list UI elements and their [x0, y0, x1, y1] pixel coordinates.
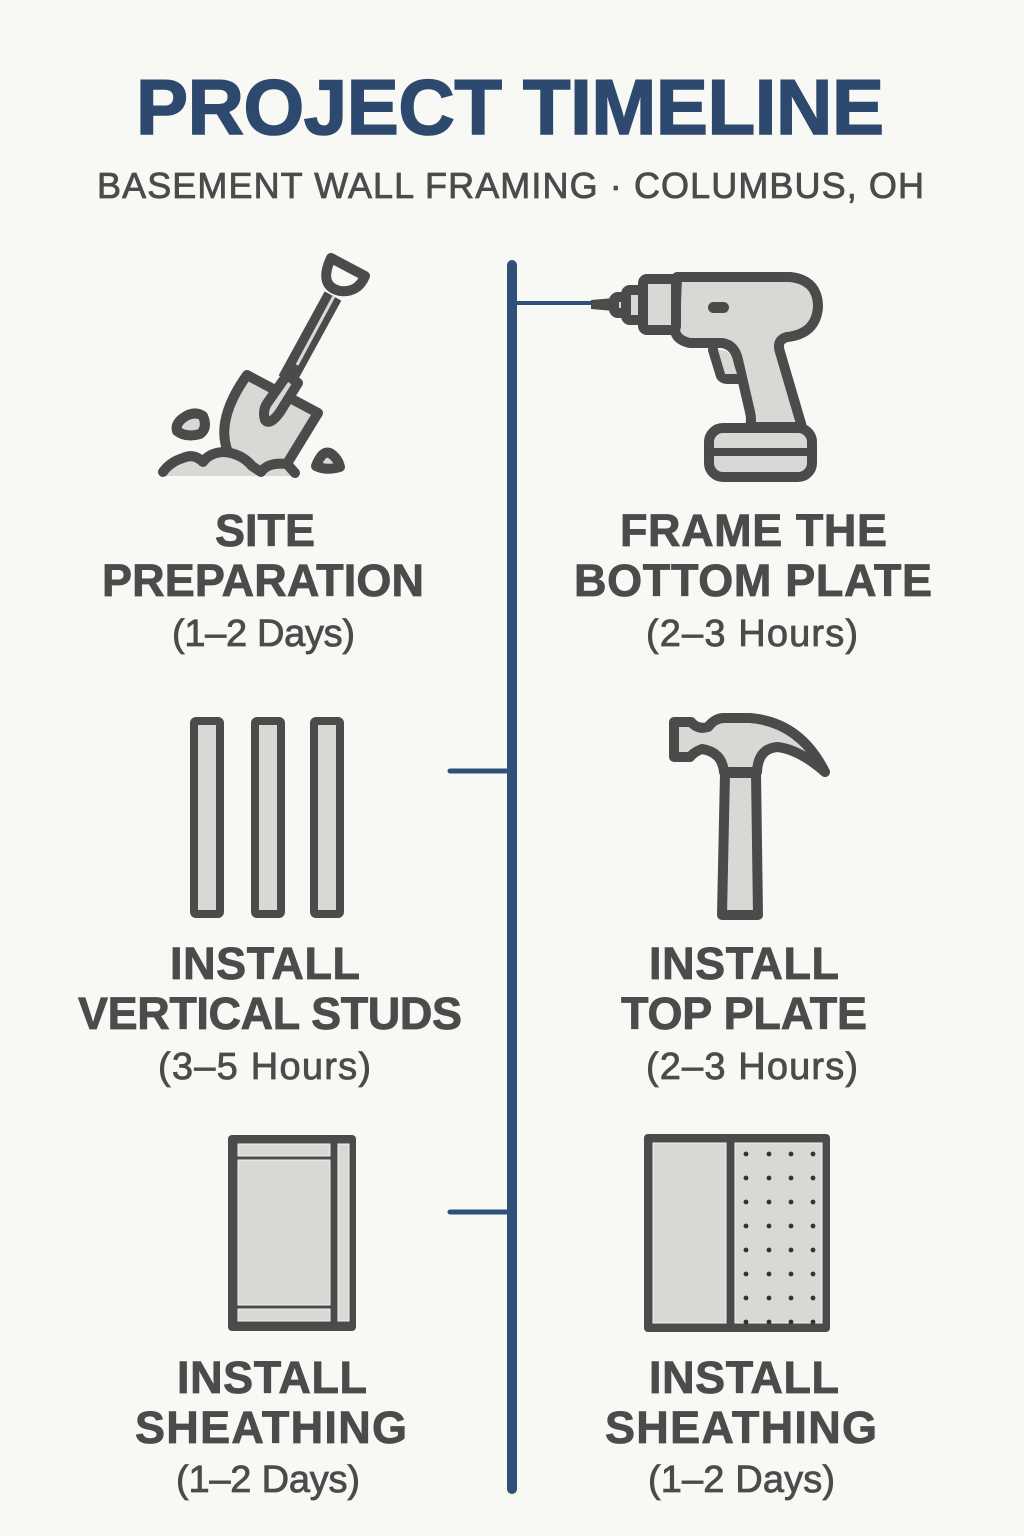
- step: site preparation: [102, 505, 424, 655]
- step: install top plate: (2–3 Hours): [646, 1046, 858, 1088]
- step: install vertical studs: [78, 938, 462, 1088]
- step: frame the bottom plate: BOTTOM PLATE: [574, 555, 932, 606]
- step: install sheathing left: INSTALL: [177, 1352, 367, 1403]
- subtitle: BASEMENT WALL FRAMING · COLUMBUS, OH: [97, 165, 924, 206]
- step: install sheathing right: INSTALL: [649, 1352, 839, 1403]
- step: install top plate: [621, 938, 867, 1088]
- icon: hammer: [674, 718, 825, 915]
- step: install sheathing left: SHEATHING: [135, 1402, 407, 1453]
- step: site preparation: (1–2 Days): [172, 613, 355, 655]
- step: frame the bottom plate: (2–3 Hours): [646, 613, 858, 655]
- step: install sheathing right: SHEATHING: [605, 1402, 877, 1453]
- icon: perforated sheathing panel: [644, 1134, 830, 1332]
- title: PROJECT TIMELINE: [136, 63, 884, 151]
- icon: wall panel framing: [228, 1135, 356, 1331]
- step: install vertical studs: VERTICAL STUDS: [78, 988, 462, 1039]
- timeline: vertical spine and branches: [450, 265, 594, 1489]
- step: frame the bottom plate: FRAME THE: [620, 505, 887, 556]
- step: install top plate: INSTALL: [649, 938, 839, 989]
- icon: vertical studs: [194, 721, 340, 914]
- step: install sheathing right: (1–2 Days): [648, 1459, 835, 1501]
- step: site preparation: SITE: [215, 505, 315, 556]
- step: install sheathing right: [605, 1352, 877, 1501]
- step: install sheathing left: [135, 1352, 407, 1501]
- icon: cordless drill: [591, 277, 818, 477]
- step: site preparation: PREPARATION: [102, 555, 424, 606]
- step: frame the bottom plate: [574, 505, 932, 655]
- step: install top plate: TOP PLATE: [621, 988, 867, 1039]
- icon: shovel: [163, 258, 365, 476]
- step: install vertical studs: (3–5 Hours): [158, 1046, 371, 1088]
- step: install sheathing left: (1–2 Days): [176, 1459, 360, 1501]
- step: install vertical studs: INSTALL: [170, 938, 360, 989]
